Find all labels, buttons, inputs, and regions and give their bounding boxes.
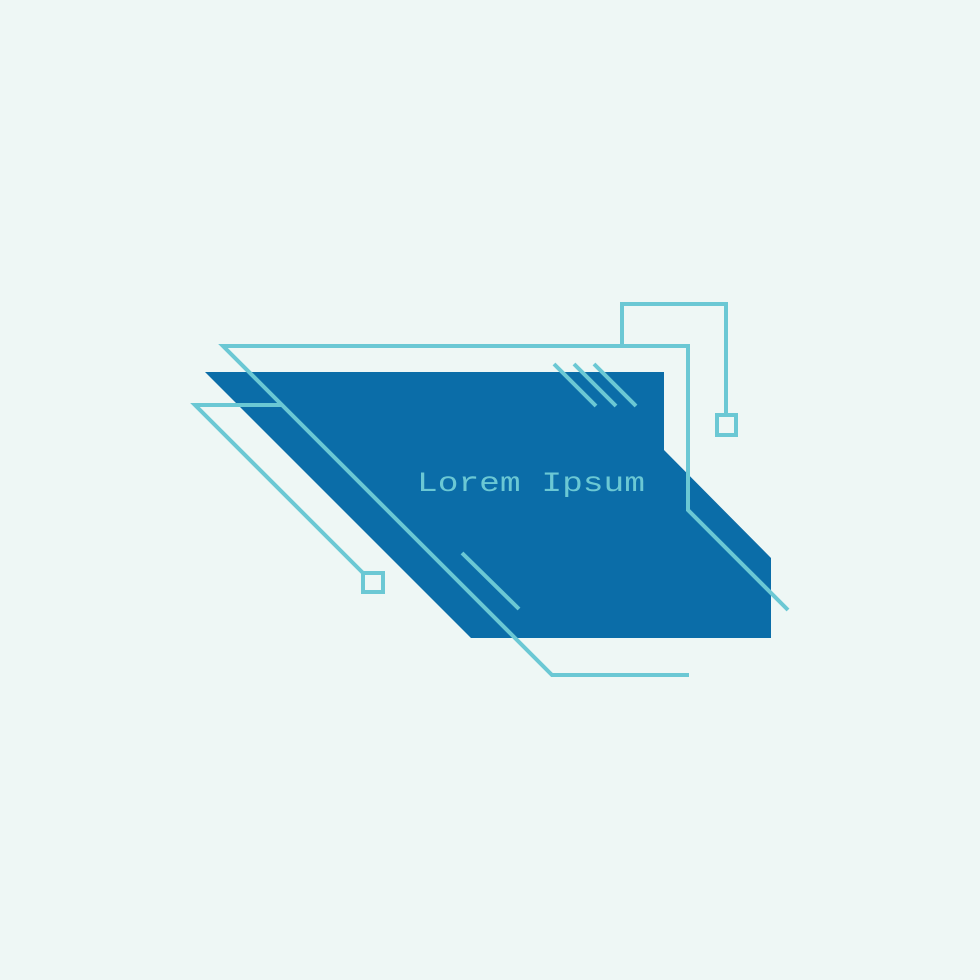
icon: left square node xyxy=(363,573,383,592)
panel: blue banner shape xyxy=(205,372,771,638)
connector: top right circuit with square node xyxy=(622,304,736,435)
icon: top right square node xyxy=(717,415,736,435)
outline: main circuit frame xyxy=(223,346,788,675)
title text: Lorem Ipsum xyxy=(417,469,645,500)
accent: lower diagonal line xyxy=(462,553,519,609)
accent: three diagonal stripes xyxy=(554,364,636,406)
connector: left circuit with square node xyxy=(195,405,383,592)
